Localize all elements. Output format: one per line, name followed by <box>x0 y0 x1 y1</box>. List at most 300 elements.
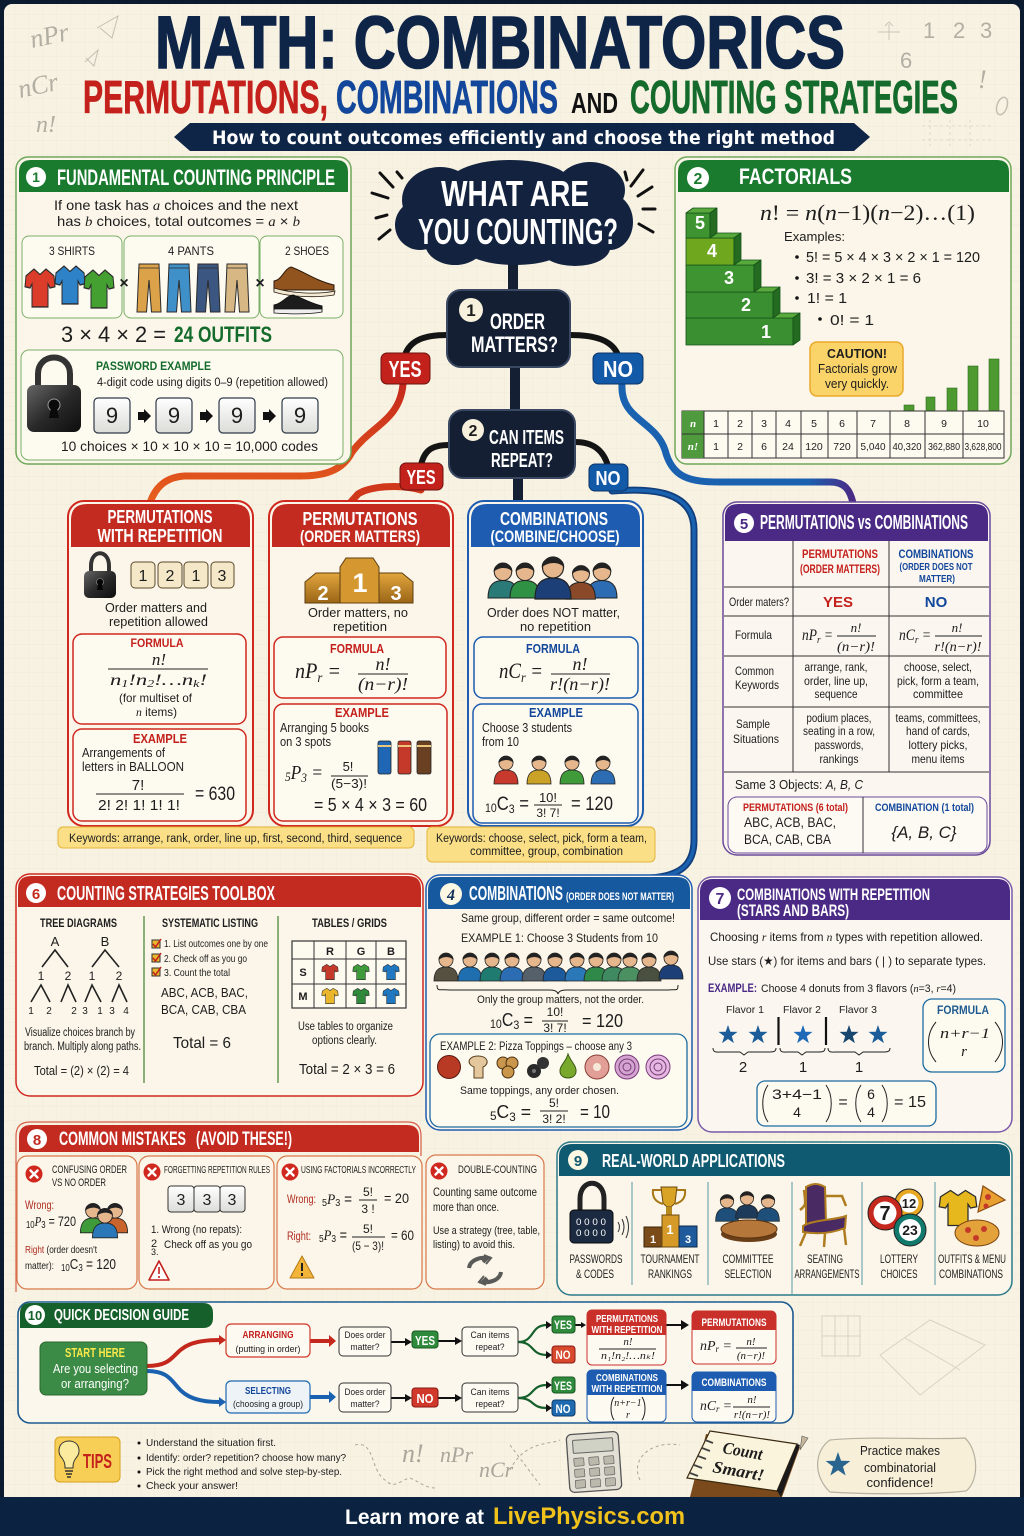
tree diagrams column: 2 <box>65 969 72 983</box>
example 2: pizza toppings: 3 <box>509 1110 516 1124</box>
mistake: using factorials incorrectly: 3 <box>335 1198 341 1209</box>
same 3 objects comparison: BCA, CAB, CBA <box>744 832 831 847</box>
mistake: forgetting repetition rules: 3. <box>151 1247 159 1257</box>
repeat outcome tags <box>552 1316 575 1416</box>
panel: combinations order does not matter: COMBINATIONS <box>469 883 563 905</box>
table rows: r!(n−r)! <box>934 640 982 655</box>
application: passwords: 0 0 0 0 <box>576 1228 606 1238</box>
selecting box <box>226 1381 310 1413</box>
card: combinations combine choose: Order does NOT matter, <box>487 605 620 620</box>
keywords note: combinations: committee, group, combination <box>470 846 623 858</box>
mistake: using factorials incorrectly: = <box>336 1227 347 1244</box>
decorative math doodles: 6 <box>900 48 912 73</box>
table rows: hand of cards, <box>906 724 970 738</box>
tips list: Check your answer! <box>146 1480 238 1492</box>
example box: Arranging 5 books <box>280 721 369 735</box>
panel: combinations with repetition: Choose 4 donuts from 3 flavors (n=3, r=4) <box>761 983 956 995</box>
icon: factorial staircase <box>686 208 800 345</box>
application: passwords: 0 0 0 0 <box>576 1217 606 1227</box>
panel: factorials: 2 <box>694 171 703 188</box>
icon: group of people <box>488 557 617 599</box>
worked result box: 6 <box>867 1086 875 1102</box>
notebook: count smart: Count <box>721 1438 765 1464</box>
stars and bars diagram: Flavor 3 <box>839 1004 877 1016</box>
table rows: seating in a row, <box>803 724 875 738</box>
example box: letters in BALLOON <box>82 760 184 774</box>
panel: quick decision guide: 10 <box>28 1308 42 1323</box>
systematic listing column: ABC, ACB, BAC, <box>161 985 248 1000</box>
card: permutations with repetition: WITH REPETITION <box>98 526 222 546</box>
arranging box: ARRANGING <box>242 1329 294 1341</box>
table rows: sequence <box>814 687 858 701</box>
can items repeat nodes: repeat? <box>476 1342 504 1353</box>
factorial examples list: 1! = 1 <box>807 290 847 307</box>
doodles: formulas and dashed lines: nCr <box>479 1457 514 1482</box>
mistake: forgetting repetition rules: 3 <box>203 1192 212 1209</box>
result card: combinations: COMBINATIONS <box>702 1377 766 1389</box>
formula box: r <box>317 671 323 686</box>
formula box: nP <box>295 658 319 683</box>
example box: 3 <box>300 770 307 785</box>
result card: permutations: = <box>719 1339 732 1354</box>
tree diagrams column: B <box>101 934 109 949</box>
systematic listing column <box>152 918 268 1052</box>
table rows: r <box>817 634 821 646</box>
tips list: Understand the situation first. <box>146 1437 276 1449</box>
tree diagrams column: A <box>51 934 60 949</box>
digit keys: 9 <box>294 403 306 428</box>
table rows: (n−r)! <box>837 640 875 655</box>
tables and grids column: TABLES / GRIDS <box>312 918 387 930</box>
subtitle: AND <box>571 88 618 120</box>
panel: combinations order does not matter: = 120 <box>582 1011 623 1031</box>
subtitle banner: How to count outcomes efficiently and choose the right method <box>212 127 835 149</box>
mistake: double counting: Use a strategy (tree, table, <box>433 1225 540 1237</box>
can items repeat nodes: repeat? <box>476 1399 504 1410</box>
formula box: n items) <box>136 705 177 719</box>
table rows: choose, select, <box>904 660 972 674</box>
digit keys: 9 <box>231 403 243 428</box>
example box: 10! <box>539 790 557 805</box>
mistake: confusing order: matter): <box>25 1260 54 1272</box>
example box: EXAMPLE <box>335 706 389 720</box>
example box: Arrangements of <box>82 746 165 760</box>
panel: counting strategies toolbox: 6 <box>32 886 40 903</box>
worked result box: = <box>838 1094 848 1111</box>
card: permutations order matters <box>269 501 453 826</box>
same 3 objects comparison: COMBINATION (1 total) <box>875 802 974 814</box>
panel: real-world applications: REAL-WORLD APPLICATIONS <box>602 1151 785 1171</box>
example box: EXAMPLE <box>133 732 187 746</box>
factorial table: 10 <box>977 418 989 430</box>
result card: permutations with repetition: WITH REPETITION <box>592 1325 662 1336</box>
panel: combinations order does not matter: 3 <box>513 1018 520 1032</box>
factorial table: 120 <box>805 441 823 453</box>
title: MATH: COMBINATORICS <box>155 1 845 84</box>
mistake: using factorials incorrectly: = 20 <box>384 1190 409 1206</box>
decision node 2: can items repeat: 2 <box>469 423 478 440</box>
application: tournament rankings <box>640 1187 700 1281</box>
callout: caution <box>810 342 903 396</box>
systematic listing column: 3. Count the total <box>164 967 230 979</box>
mistake: using factorials incorrectly <box>277 1156 422 1289</box>
digit keys: 9 <box>106 403 118 428</box>
panel: combinations order does not matter: 10! <box>547 1005 563 1019</box>
mistake: forgetting repetition rules: 3 <box>177 1192 186 1209</box>
yes label 2 <box>400 463 443 490</box>
example box: 5 <box>285 769 291 784</box>
example 2: pizza toppings: EXAMPLE 2: Pizza Toppings – choose any 3 <box>440 1041 632 1053</box>
decision node 2: can items repeat: CAN ITEMS <box>489 427 564 449</box>
repeat outcome tags: YES <box>554 1318 572 1332</box>
selecting box: SELECTING <box>245 1385 291 1397</box>
tables and grids column: M <box>298 991 308 1003</box>
table rows: Situations <box>733 732 779 746</box>
icon: shoes <box>274 267 335 314</box>
yes label 2: YES <box>406 467 436 489</box>
application: lottery choices: CHOICES <box>880 1267 918 1281</box>
panel: common mistakes: 8 <box>33 1132 41 1149</box>
factorial table: 8 <box>904 418 910 430</box>
table rows: pick, form a team, <box>897 674 979 688</box>
tree diagrams column: 3 <box>82 1006 88 1017</box>
icon: books <box>378 741 431 774</box>
icon: padlock and tiles: 3 <box>218 568 227 585</box>
mistake: using factorials incorrectly: USING FACTORIALS INCORRECTLY <box>301 1165 416 1176</box>
decorative math doodles: 1 <box>923 18 935 43</box>
icon: padlock and tiles: 1 <box>139 568 148 585</box>
result card: combinations with repetition: WITH REPETITION <box>592 1384 662 1395</box>
footer: Learn more at <box>345 1506 484 1529</box>
mistake: using factorials incorrectly: 3 <box>331 1234 336 1245</box>
mistake: confusing order: CONFUSING ORDER <box>52 1164 127 1176</box>
result card: combinations with repetition <box>587 1370 666 1422</box>
same 3 objects comparison: ABC, ACB, BAC, <box>744 815 836 830</box>
result card: combinations: r!(n−r)! <box>734 1409 770 1421</box>
example box <box>274 704 447 821</box>
application: committee selection: SELECTION <box>724 1267 772 1281</box>
keywords note: combinations <box>427 827 655 862</box>
mistake: forgetting repetition rules <box>139 1156 274 1289</box>
does order matter nodes: matter? <box>350 1342 380 1353</box>
start here box: START HERE <box>65 1345 125 1360</box>
application: tournament rankings: TOURNAMENT <box>640 1252 700 1266</box>
icon: factorial staircase: 4 <box>707 241 717 261</box>
tips box: TIPS <box>83 1451 112 1473</box>
tree diagrams column: 1 <box>28 1006 34 1017</box>
result card: combinations: n! <box>747 1394 757 1406</box>
mistake: double counting: DOUBLE-COUNTING <box>458 1164 537 1176</box>
table rows: arrange, rank, <box>804 660 868 674</box>
example box: 3! 7! <box>536 806 560 820</box>
table rows: Order maters? <box>729 595 789 609</box>
formula box: ! <box>199 672 207 689</box>
worked result box: 4 <box>793 1104 801 1120</box>
decorative math doodles <box>15 16 1010 342</box>
icon: factorial staircase: 3 <box>724 268 734 288</box>
panel: fundamental counting principle: FUNDAMENTAL COUNTING PRINCIPLE <box>57 165 335 190</box>
footer <box>0 1497 1024 1536</box>
formula box: r <box>521 671 526 686</box>
icon: podium <box>305 558 413 605</box>
card: combinations combine choose: COMBINATIONS <box>500 509 608 529</box>
formula box: r!(n−r)! <box>550 674 610 695</box>
digit keys <box>94 398 318 433</box>
outfit choices row: 3 SHIRTS <box>49 244 95 258</box>
yes no tags: NO <box>416 1391 434 1406</box>
decorative math doodles: ! <box>978 65 987 94</box>
tips box <box>55 1437 120 1482</box>
doodle: geometry sketch right of guide <box>822 1316 985 1395</box>
table rows: teams, committees, <box>896 711 980 725</box>
example box: 5! <box>343 759 353 774</box>
stars and bars diagram: 1 <box>855 1059 863 1076</box>
notebook: count smart: Smart! <box>711 1457 766 1485</box>
decorative math doodles: nCr <box>15 67 62 104</box>
can items repeat nodes: Can items <box>470 1387 510 1398</box>
panel: factorials: FACTORIALS <box>739 164 852 189</box>
formula box: r <box>961 1044 967 1060</box>
icon: calculator <box>566 1431 622 1493</box>
formula box <box>474 637 638 698</box>
callout: caution: CAUTION! <box>827 346 887 361</box>
panel: combinations order does not matter: EXAMPLE 1: Choose 3 Students from 10 <box>461 933 658 945</box>
panel: real-world applications <box>557 1142 1012 1295</box>
yes no tags <box>412 1331 438 1407</box>
mistake: forgetting repetition rules: 2 <box>151 1238 157 1250</box>
application: lottery choices: 7 <box>879 1203 891 1225</box>
example box: (5−3)! <box>331 776 367 791</box>
mistake: using factorials incorrectly: (5 − 3)! <box>352 1239 384 1253</box>
no label 1 <box>593 353 643 384</box>
result card: combinations with repetition: n+r−1 <box>614 1398 642 1409</box>
mistake: double counting: Counting same outcome <box>433 1185 537 1199</box>
application: committee selection: COMMITTEE <box>722 1252 774 1266</box>
arranging box: (putting in order) <box>236 1344 300 1355</box>
panel: combinations order does not matter: = <box>519 1010 533 1030</box>
same 3 objects comparison: PERMUTATIONS (6 total) <box>743 802 848 814</box>
formula box: n! <box>572 654 588 674</box>
factorial table <box>682 411 1004 458</box>
panel: combinations with repetition: EXAMPLE: <box>708 983 757 995</box>
card: permutations with repetition: PERMUTATIONS <box>108 507 212 527</box>
panel: combinations order does not matter: Only the group matters, not the order. <box>477 994 644 1006</box>
panel: combinations with repetition: (STARS AND BARS) <box>737 901 849 920</box>
yes no tags: YES <box>415 1333 435 1348</box>
example box: = 120 <box>571 794 613 815</box>
factorial table: 4 <box>785 418 791 430</box>
mistake: forgetting repetition rules: 3 <box>228 1192 237 1209</box>
panel: combinations with repetition: Choosing r items from n types with repetition allowed. <box>710 930 983 944</box>
table rows: n! <box>952 620 962 635</box>
mistake: using factorials incorrectly: P <box>326 1192 335 1208</box>
application: lottery choices: 12 <box>902 1196 916 1211</box>
application: passwords: PASSWORDS <box>570 1252 622 1266</box>
icon: padlock and tiles <box>84 553 234 598</box>
no label 2: NO <box>596 468 620 490</box>
mistake: double counting: more than once. <box>433 1200 499 1214</box>
example box: from 10 <box>482 735 519 749</box>
factorial table: 362,880 <box>928 441 960 453</box>
digit keys: 9 <box>168 403 180 428</box>
icon: factorial staircase: 5 <box>695 213 705 233</box>
does order matter nodes: Does order <box>344 1330 386 1341</box>
tree diagrams column: 2 <box>116 969 123 983</box>
formula box: FORMULA <box>330 642 384 656</box>
factorial examples list: 5! = 5 × 4 × 3 × 2 × 1 = 120 <box>806 249 980 266</box>
formula box: FORMULA <box>130 636 184 650</box>
application: seating arrangements: ARRANGEMENTS <box>794 1267 860 1281</box>
panel: fundamental counting principle: If one task has a choices and the next <box>54 197 298 214</box>
student row <box>434 951 683 994</box>
mistake: confusing order: VS NO ORDER <box>52 1177 106 1189</box>
factorial table: 40,320 <box>892 441 922 453</box>
application: tournament rankings: RANKINGS <box>648 1267 692 1281</box>
panel: permutations vs combinations: 5 <box>740 516 748 533</box>
icon: light bulb <box>59 1441 79 1477</box>
panel: combinations order does not matter: (ORDER DOES NOT MATTER) <box>566 891 674 903</box>
factorial examples list: 3! = 3 × 2 × 1 = 6 <box>806 270 921 287</box>
table rows: nC <box>899 627 918 644</box>
table rows: podium places, <box>806 711 872 725</box>
footer: LivePhysics.com <box>493 1503 685 1530</box>
tips list: Pick the right method and solve step-by-step. <box>146 1466 342 1478</box>
tree diagrams column: TREE DIAGRAMS <box>40 918 117 930</box>
yes label 1 <box>381 353 430 384</box>
factorial examples list <box>795 249 980 329</box>
result card: permutations: r <box>716 1344 720 1354</box>
example box: 7! <box>132 777 144 794</box>
same 3 objects comparison: {A, B, C} <box>891 823 957 842</box>
stars and bars diagram: 2 <box>739 1059 747 1076</box>
password example: 4-digit code using digits 0–9 (repetition allowed) <box>97 377 328 389</box>
card: permutations with repetition: repetition allowed <box>109 614 208 629</box>
can items repeat nodes: Can items <box>470 1330 510 1341</box>
table rows: passwords, <box>814 738 864 752</box>
same 3 objects comparison <box>728 797 987 853</box>
factorial table: 5 <box>811 418 817 430</box>
mistake: confusing order: 3 <box>41 1220 46 1231</box>
table rows: nP <box>802 627 820 644</box>
example box <box>73 729 246 821</box>
doodles: formulas and dashed lines <box>355 1439 680 1488</box>
central cloud: what are you counting <box>372 160 655 266</box>
example box: 2! 2! 1! 1! 1! <box>98 797 180 814</box>
subtitle <box>83 71 958 123</box>
example box: on 3 spots <box>280 735 331 749</box>
panel: permutations vs combinations <box>723 502 990 855</box>
application: outfits and menu <box>938 1186 1006 1281</box>
panel: combinations with repetition: Use stars (★) for items and bars ( | ) to separate types. <box>708 954 986 968</box>
table rows: Sample <box>736 717 770 731</box>
tables and grids column: B <box>387 946 395 958</box>
panel: quick decision guide: QUICK DECISION GUIDE <box>54 1307 189 1324</box>
table column headings: (ORDER MATTERS) <box>800 562 880 576</box>
mistake: double counting: listing) to avoid this. <box>433 1239 515 1251</box>
factorial table: 2 <box>737 441 743 453</box>
arranging box <box>226 1324 310 1357</box>
icon: padlock and tiles: 1 <box>192 568 201 585</box>
tips list: Identify: order? repetition? choose how many? <box>146 1452 346 1464</box>
table rows: = <box>918 627 931 644</box>
factorial table: 1 <box>713 418 719 430</box>
table rows: Keywords <box>735 678 779 692</box>
application: tournament rankings: 3 <box>685 1234 691 1246</box>
application: lottery choices <box>868 1189 926 1281</box>
panel: factorials: n! = n(n−1)(n−2)…(1) <box>760 200 975 225</box>
panel: fundamental counting principle: 24 OUTFITS <box>174 322 272 347</box>
factorial table: 1 <box>713 441 719 453</box>
decision node 1: order matters: MATTERS? <box>471 332 558 357</box>
mistake: confusing order: P <box>34 1215 42 1230</box>
panel: combinations order does not matter: 10 <box>490 1017 502 1031</box>
tree diagrams column: branch. Multiply along paths. <box>24 1041 141 1053</box>
stars and bars diagram <box>713 1004 890 1076</box>
mistake: double counting <box>426 1155 544 1289</box>
example box: 10 <box>485 801 497 815</box>
result card: combinations: = <box>719 1399 732 1414</box>
application: passwords: & CODES <box>576 1267 614 1281</box>
yes label 1: YES <box>388 356 422 382</box>
systematic listing column: 1. List outcomes one by one <box>164 938 268 950</box>
factorial examples list: 0! = 1 <box>830 312 874 329</box>
decision node 1: order matters <box>447 290 570 367</box>
table column headings: MATTER) <box>919 573 955 585</box>
panel: combinations with repetition <box>698 877 1012 1132</box>
mistake: using factorials incorrectly: 5 <box>319 1234 324 1245</box>
panel: combinations with repetition: 7 <box>716 891 725 908</box>
formula box: FORMULA <box>937 1005 989 1017</box>
example box: = 630 <box>195 784 235 805</box>
formula box: nC <box>499 658 525 683</box>
panel: counting strategies toolbox <box>16 874 423 1096</box>
tips list <box>138 1437 346 1492</box>
tree diagrams column: 2 <box>71 1006 77 1017</box>
card: permutations with repetition <box>68 501 253 826</box>
example 2: pizza toppings: Same toppings, any order chosen. <box>460 1085 619 1097</box>
card: permutations with repetition: Order matters and <box>105 600 207 615</box>
can items repeat nodes <box>462 1327 518 1412</box>
formula box: n <box>110 672 118 689</box>
factorial table: 6 <box>839 418 845 430</box>
repeat outcome tags: NO <box>556 1348 570 1362</box>
tables and grids column: G <box>357 946 365 958</box>
mistake: using factorials incorrectly: Wrong: <box>287 1194 316 1206</box>
start here box: or arranging? <box>61 1376 129 1391</box>
start here box <box>40 1342 147 1395</box>
mistake: confusing order <box>17 1156 137 1289</box>
icon: cycle arrows <box>469 1255 501 1285</box>
example 2: pizza toppings: = 10 <box>580 1102 610 1122</box>
factorial table: 5,040 <box>860 441 886 453</box>
application: seating arrangements: SEATING <box>807 1252 843 1266</box>
result card: permutations with repetition: n! <box>623 1336 633 1348</box>
repeat outcome tags: YES <box>554 1379 572 1393</box>
card: permutations order matters: (ORDER MATTERS) <box>300 527 420 546</box>
repeat outcome tags: NO <box>556 1402 570 1416</box>
password example: PASSWORD EXAMPLE <box>96 361 211 373</box>
example box: C <box>497 794 509 815</box>
no label 1: NO <box>603 356 633 382</box>
systematic listing column: 2. Check off as you go <box>164 953 247 965</box>
result card: permutations: n! <box>746 1336 756 1348</box>
application: committee selection <box>716 1192 779 1281</box>
table column headings: (ORDER DOES NOT <box>900 561 973 573</box>
central cloud: what are you counting: WHAT ARE <box>441 173 589 214</box>
tree diagrams column: 1 <box>97 1006 103 1017</box>
application: lottery choices: 23 <box>902 1222 918 1238</box>
factorial table: 720 <box>833 441 851 453</box>
